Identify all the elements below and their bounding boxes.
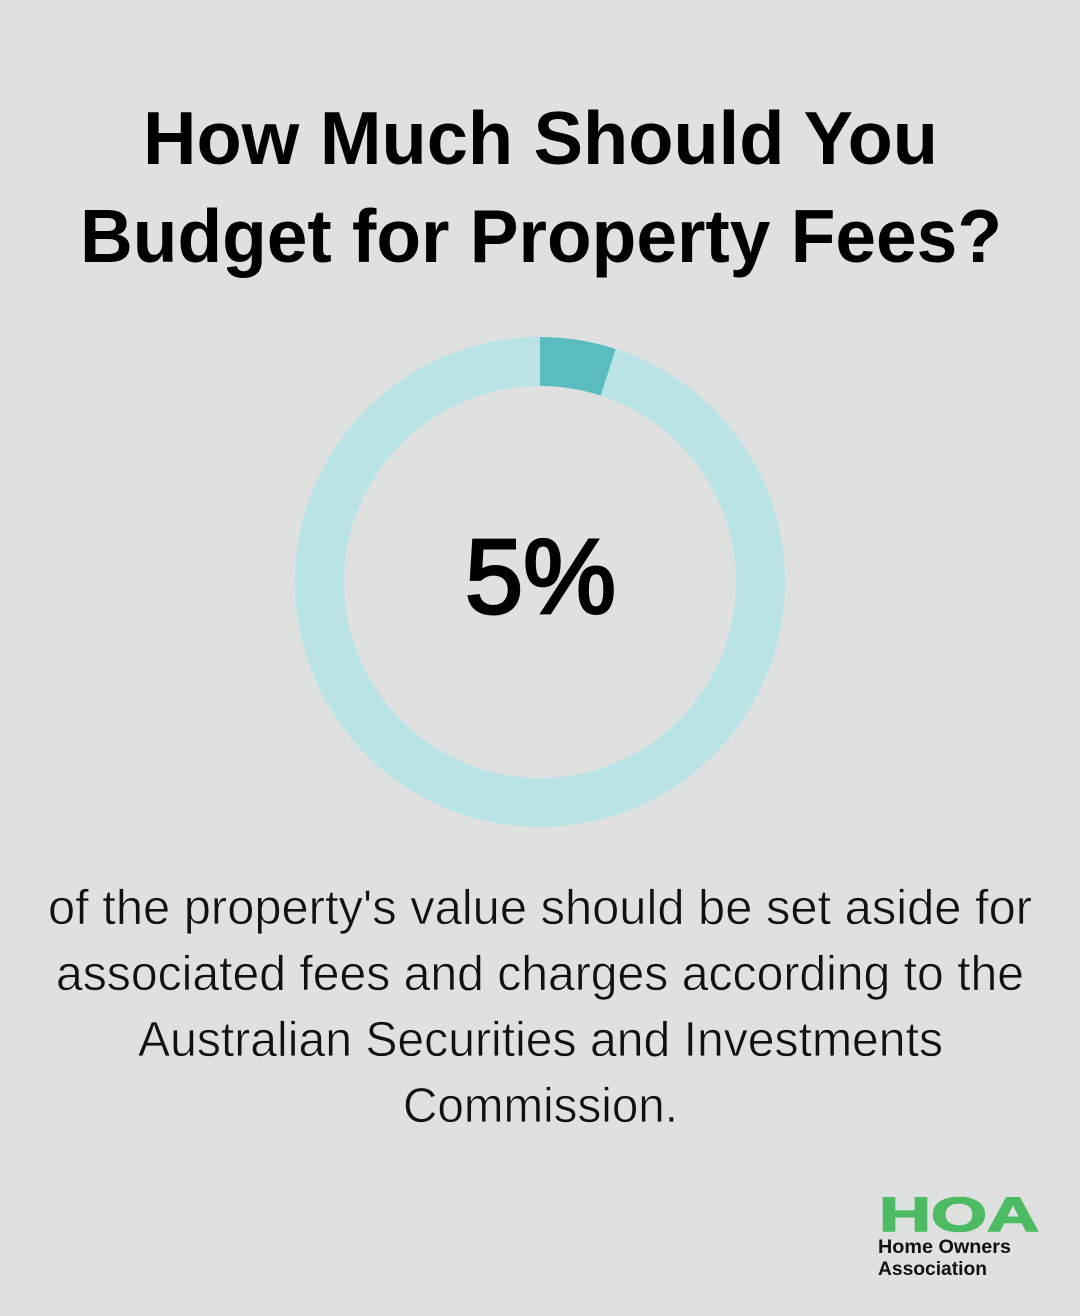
title: Budget for Property Fees? [80, 194, 1002, 278]
description text [48, 881, 1032, 1133]
logo: HOA Home Owners Association: Home Owners [878, 1237, 1011, 1258]
description text: Commission. [403, 1079, 678, 1133]
description text: of the property's value should be set aside for [48, 881, 1032, 935]
logo: HOA Home Owners Association: Association [878, 1259, 987, 1280]
title: How Much Should You [143, 96, 938, 180]
title [80, 96, 1002, 278]
description text: associated fees and charges according to the [56, 947, 1024, 1001]
logo: HOA Home Owners Association [878, 1189, 1039, 1280]
highlighted 5% slice [540, 337, 616, 396]
description text: Australian Securities and Investments [138, 1013, 943, 1067]
logo: HOA Home Owners Association: HOA [879, 1189, 1039, 1242]
donut chart: 5% [320, 337, 760, 802]
center value: 5% [465, 518, 616, 636]
